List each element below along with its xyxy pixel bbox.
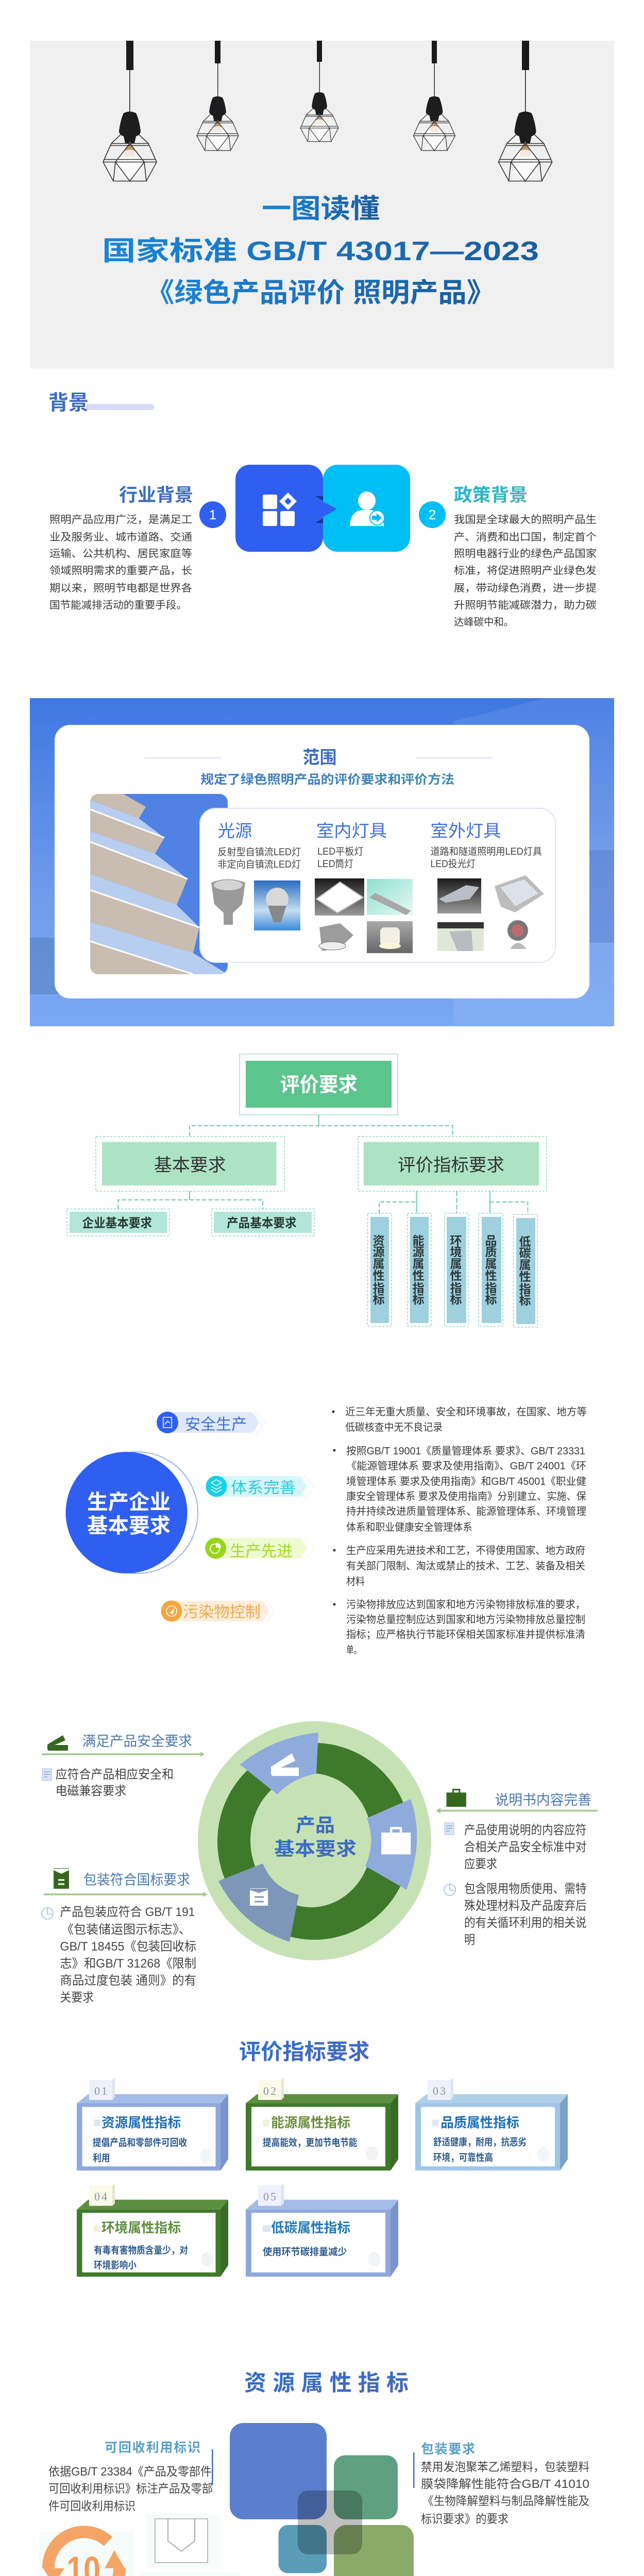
node: quality indicator: 标 — [485, 1293, 497, 1306]
industry background text: 国节能减排活动的重要手段。 — [49, 599, 187, 611]
node: product requirements — [211, 1209, 314, 1236]
card 03 quality: 舒适健康，耐用，抗恶劣 — [433, 2136, 527, 2148]
indoor luminaires: LED筒灯 — [317, 858, 353, 870]
node: resource indicator: 属 — [373, 1257, 384, 1270]
card 04 environment: 环境影响小 — [94, 2259, 137, 2271]
panel: background — [48, 392, 597, 628]
card 02 energy — [246, 2078, 398, 2171]
packaging requirement text: 标识要求》的要求 — [421, 2512, 509, 2526]
node: enterprise requirements — [67, 1209, 170, 1236]
node: resource indicator: 性 — [373, 1269, 384, 1282]
bullets: pollution control — [333, 1599, 585, 1656]
bullets: advanced production: 有关部门限制、淘汰或禁止的技术、工艺、装备及相关 — [346, 1560, 585, 1572]
card 04 environment — [77, 2184, 228, 2277]
node: low-carbon indicator — [513, 1214, 538, 1327]
node: energy indicator: 源 — [412, 1245, 425, 1259]
recyclable marking text: 件可回收利用标识 — [48, 2499, 135, 2513]
light sources: 光源 — [217, 821, 252, 840]
bullets: management systems: 境管理体系 要求及使用指南》和GB/T 45001《职业健 — [346, 1476, 586, 1487]
bullets: pollution control: 污染物总量控制应达到国家和地方污染物排放总量控制 — [346, 1614, 585, 1625]
callout: manual content: 说明书内容完善 — [495, 1792, 591, 1808]
industry background text: 业及服务业、城市道路、交通 — [49, 531, 192, 543]
callout: packaging: 商品过度包装 通则》的有 — [60, 1974, 196, 1988]
panel: enterprise basic requirements — [66, 1406, 587, 1656]
main circle — [66, 1452, 198, 1573]
node: quality indicator: 品 — [485, 1234, 497, 1247]
section heading: 资源属性指标 — [244, 2371, 409, 2396]
packaging requirement text: 禁用发泡聚苯乙烯塑料，包装塑料 — [421, 2460, 589, 2473]
root node: 评价要求 — [280, 1074, 358, 1096]
industry background text: 运输、公共机构、居民家庭等 — [49, 548, 192, 560]
node: environment indicator: 境 — [450, 1245, 462, 1259]
node: resource indicator — [368, 1213, 392, 1326]
bullets: management systems: 《能源管理体系 要求及使用指南》、GB/T 24001《环 — [346, 1460, 586, 1472]
tag: advanced production — [205, 1537, 314, 1561]
policy background text: 政策背景 — [454, 485, 528, 505]
policy background text: 升照明节能减碳潜力，助力碳 — [454, 599, 597, 611]
node: resource indicator: 指 — [373, 1281, 384, 1295]
wedge: packaging — [218, 1863, 299, 1942]
bullets: management systems: 体系和职业健康安全管理体系 — [346, 1521, 472, 1533]
bullets: pollution control: 指标；应严格执行节能环保相关国家标准并提供标准清 — [346, 1629, 585, 1640]
card 01 resource: 提倡产品和零部件可回收 — [93, 2137, 187, 2148]
callout: manual content — [436, 1789, 598, 1947]
main circle: 基本要求 — [87, 1515, 171, 1537]
bullets: management systems: 康安全管理体系 要求及使用指南》分别建立、实施、保 — [346, 1490, 586, 1502]
callout: packaging: 《包装储运图示标志》、 — [61, 1923, 191, 1937]
policy background text: 照明电器行业的绿色产品国家 — [454, 548, 597, 560]
card 02 energy: 提高能效，更加节电节能 — [263, 2137, 358, 2148]
tag: sound system: 体系完善 — [231, 1480, 296, 1497]
node: quality indicator: 性 — [485, 1269, 497, 1282]
light sources: 反射型自镇流LED灯 — [217, 846, 301, 858]
recyclable marking text: 可回收利用标识 — [105, 2441, 200, 2455]
root node — [240, 1054, 398, 1115]
scope heading: 范围 — [303, 748, 337, 768]
heading: 背景: 背景 — [48, 392, 89, 414]
node: environment indicator: 性 — [450, 1269, 462, 1282]
recyclable marking text: 依据GB/T 23384《产品及零部件 — [48, 2465, 212, 2478]
callout: manual content: 合相关产品安全标准中对 — [464, 1840, 586, 1854]
node: energy indicator: 指 — [412, 1281, 425, 1295]
packaging requirement text — [413, 2442, 589, 2526]
industry background text: 领域照明需求的重要产品，长 — [49, 565, 192, 577]
node: energy indicator: 性 — [412, 1269, 425, 1282]
connectors — [118, 1115, 528, 1214]
policy background text — [454, 485, 597, 628]
node: quality indicator: 指 — [485, 1281, 497, 1295]
node: low-carbon indicator: 低 — [519, 1235, 531, 1248]
bullets: safe production — [332, 1406, 587, 1433]
node: energy indicator: 属 — [412, 1257, 425, 1270]
node: resource indicator: 源 — [373, 1245, 384, 1259]
node: basic requirements: 基本要求 — [154, 1156, 226, 1175]
wedge: safety — [240, 1733, 318, 1794]
callout: packaging: GB/T 18455《包装回收标 — [60, 1940, 196, 1954]
callout: product safety — [42, 1734, 205, 1798]
node: resource indicator: 资 — [373, 1234, 384, 1247]
bullets: management systems: 持并持续改进质量管理体系、能源管理体系、环境管理 — [346, 1505, 586, 1517]
callout: manual content: 包含限用物质使用、需特 — [464, 1882, 586, 1896]
light sources: 非定向自镇流LED灯 — [217, 859, 301, 870]
node: environment indicator: 属 — [450, 1257, 462, 1270]
heading: 背景 — [48, 392, 154, 414]
card 01 resource: 01 — [94, 2084, 107, 2097]
card 04 environment: 04 — [94, 2190, 107, 2203]
callout: product safety: 电磁兼容要求 — [56, 1784, 126, 1798]
donut chart — [198, 1721, 431, 1960]
bullets: advanced production: 材料 — [346, 1575, 365, 1587]
badge 1 — [199, 501, 226, 528]
bullets: advanced production — [333, 1545, 585, 1587]
tag: safe production: 安全生产 — [185, 1416, 247, 1433]
node: product requirements: 产品基本要求 — [227, 1216, 297, 1230]
node: quality indicator — [479, 1213, 503, 1326]
bullets: management systems: 按照GB/T 19001《质量管理体系 要求》、GB/T 23331 — [346, 1445, 585, 1457]
card 01 resource — [77, 2078, 228, 2171]
policy background text: 产、消费和出口国，制定首个 — [454, 531, 597, 543]
card 05 low carbon: 05 — [263, 2190, 276, 2203]
donut centre label — [274, 1815, 357, 1859]
pendant lamps — [103, 41, 552, 181]
node: environment indicator: 环 — [450, 1234, 462, 1247]
policy background text: 达峰碳中和。 — [454, 616, 514, 628]
header panel — [30, 41, 614, 368]
product card — [200, 808, 555, 962]
tag: advanced production: 生产先进 — [230, 1543, 293, 1560]
card 01 resource: 资源属性指标 — [101, 2115, 181, 2130]
callout: packaging: 关要求 — [60, 1991, 94, 2005]
indoor luminaires: LED平板灯 — [317, 846, 364, 857]
title — [102, 194, 539, 308]
central icon tiles — [235, 465, 410, 552]
node: low-carbon indicator: 指 — [519, 1282, 531, 1296]
node: enterprise requirements: 企业基本要求 — [82, 1216, 152, 1230]
card 04 environment: 有毒有害物质含量少，对 — [94, 2244, 188, 2256]
card 03 quality: 品质属性指标 — [440, 2115, 519, 2130]
packaging requirement text: 《生物降解塑料与制品降解性能及 — [422, 2494, 589, 2507]
donut centre label: 产品 — [296, 1815, 335, 1836]
callout: packaging: 包装符合国标要求 — [83, 1872, 190, 1888]
callout: manual content: 明 — [464, 1933, 475, 1947]
badge 1: 1 — [209, 507, 216, 522]
card 02 energy: 02 — [263, 2084, 276, 2097]
bullets: pollution control: 单。 — [346, 1644, 362, 1656]
callout: packaging — [42, 1868, 207, 2005]
callout: manual content: 产品使用说明的内容应符 — [464, 1823, 586, 1837]
scope heading: 规定了绿色照明产品的评价要求和评价方法 — [200, 772, 454, 787]
tag: safe production — [157, 1411, 265, 1435]
callout: manual content: 殊处理材料及产品废弃后 — [464, 1899, 586, 1913]
section heading: 评价指标要求 — [239, 2040, 370, 2064]
bullets: advanced production: 生产应采用先进技术和工艺，不得使用国家、地方政府 — [346, 1545, 585, 1556]
card 05 low carbon — [246, 2184, 398, 2277]
industry background text: 行业背景 — [119, 485, 193, 505]
packaging requirement text: 膜袋降解性能符合GB/T 41010 — [421, 2477, 589, 2490]
outdoor luminaires — [431, 821, 544, 951]
node: low-carbon indicator: 碳 — [519, 1246, 531, 1260]
node: energy indicator: 能 — [412, 1234, 425, 1247]
node: low-carbon indicator: 性 — [519, 1270, 531, 1283]
industry background text: 期以来，照明节电都是世界各 — [49, 582, 192, 594]
callout: manual content: 应要求 — [464, 1857, 497, 1871]
title: 国家标准 GB/T 43017—2023 — [102, 236, 539, 266]
card 05 low carbon: 使用环节碳排量减少 — [263, 2246, 347, 2258]
icon: 10-year mark — [39, 2532, 133, 2576]
tag: sound system — [206, 1475, 314, 1499]
icon: tag outline mark — [146, 2514, 220, 2568]
bullets: safe production: 低碳核查中无不良记录 — [345, 1421, 443, 1433]
callout: manual content: 的有关循环利用的相关说 — [464, 1916, 586, 1930]
main circle: 生产企业 — [87, 1491, 171, 1514]
card 03 quality: 环境，可靠性高 — [433, 2151, 493, 2163]
callout: packaging: 志》和GB/T 31268《限制 — [60, 1957, 196, 1971]
node: energy indicator — [408, 1213, 431, 1326]
packaging requirement text: 包装要求 — [421, 2442, 475, 2456]
bullets: safe production: 近三年无重大质量、安全和环境事故，在国家、地方等 — [345, 1406, 587, 1418]
node: indicator requirements — [358, 1137, 547, 1191]
badge 2: 2 — [429, 507, 436, 522]
icon: recycling triangle — [140, 2572, 240, 2576]
node: resource indicator: 标 — [373, 1293, 384, 1306]
panel: evaluation indicators — [77, 2040, 568, 2277]
bullets: pollution control: 污染物排放应达到国家和地方污染物排放标准的要求， — [346, 1599, 585, 1611]
outdoor luminaires: LED投光灯 — [431, 858, 476, 870]
policy background text: 我国是全球最大的照明产品生 — [454, 514, 597, 526]
indoor luminaires — [315, 821, 413, 953]
callout: packaging: 产品包装应符合 GB/T 191 — [60, 1905, 195, 1919]
card 02 energy: 能源属性指标 — [271, 2115, 350, 2130]
callout: product safety: 应符合产品相应安全和 — [56, 1768, 174, 1782]
industry background text — [49, 485, 193, 611]
tag: pollution control — [161, 1600, 274, 1623]
recyclable marking text: 可回收利用标识》标注产品及零部 — [48, 2482, 213, 2495]
scope heading — [144, 748, 493, 787]
overlapping blocks — [230, 2423, 414, 2576]
panel: product basic requirements — [42, 1721, 598, 2005]
indoor luminaires: 室内灯具 — [316, 821, 387, 840]
building photo — [90, 794, 228, 974]
outdoor luminaires: 室外灯具 — [431, 821, 501, 840]
recyclable marking text — [48, 2441, 213, 2513]
tag: pollution control: 污染物控制 — [183, 1604, 261, 1621]
card 05 low carbon: 低碳属性指标 — [271, 2220, 350, 2235]
donut centre label: 基本要求 — [274, 1838, 357, 1859]
policy background text: 标准，将促进照明产业绿色发 — [454, 565, 597, 577]
bullets: management systems — [333, 1445, 586, 1533]
outdoor luminaires: 道路和隧道照明用LED灯具 — [431, 846, 542, 857]
node: quality indicator: 属 — [485, 1257, 497, 1270]
node: quality indicator: 质 — [485, 1245, 497, 1259]
node: low-carbon indicator: 属 — [519, 1258, 531, 1272]
node: low-carbon indicator: 标 — [519, 1294, 531, 1307]
node: environment indicator: 指 — [450, 1281, 462, 1295]
node: energy indicator: 标 — [412, 1293, 425, 1306]
node: indicator requirements: 评价指标要求 — [398, 1156, 504, 1175]
wedge: manual — [365, 1799, 417, 1890]
light sources — [211, 821, 301, 930]
title: 一图读懂 — [262, 194, 380, 224]
industry background text: 照明产品应用广泛，是满足工 — [49, 514, 192, 526]
panel: resource attributes — [39, 2371, 589, 2576]
node: environment indicator: 标 — [450, 1293, 462, 1306]
card 04 environment: 环境属性指标 — [101, 2220, 181, 2235]
panel: scope — [30, 698, 614, 1026]
card 03 quality: 03 — [433, 2084, 446, 2097]
policy background text: 展，带动绿色消费，进一步提 — [454, 582, 597, 594]
tree diagram: evaluation requirements — [67, 1054, 547, 1327]
node: basic requirements — [96, 1137, 284, 1191]
title: 《绿色产品评价 照明产品》 — [146, 278, 495, 308]
card 03 quality — [415, 2078, 568, 2171]
callout: product safety: 满足产品安全要求 — [82, 1734, 192, 1749]
node: environment indicator — [445, 1213, 469, 1326]
card 01 resource: 利用 — [93, 2153, 110, 2164]
badge 2 — [419, 501, 446, 528]
